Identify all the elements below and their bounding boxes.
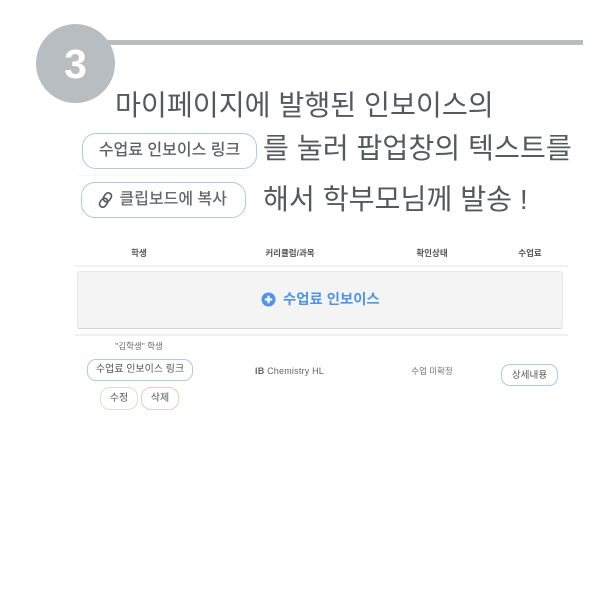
button: invoice link xyxy=(87,359,193,381)
instruction line 1: 마이페이지에 발행된 인보이스의 xyxy=(115,89,494,121)
button: details: 상세내용 xyxy=(512,370,547,381)
table header: curriculum: 커리큘럼/과목 xyxy=(265,248,315,258)
step number badge xyxy=(36,24,115,103)
step number badge: 3 xyxy=(64,41,87,87)
button: edit: 수정 xyxy=(110,393,128,404)
student name: "김학생" 학생 xyxy=(115,341,163,351)
button: edit xyxy=(100,387,138,410)
table header: fee: 수업료 xyxy=(518,248,542,258)
header rule xyxy=(105,40,583,45)
button: delete xyxy=(141,387,179,410)
button: details xyxy=(501,364,558,386)
header divider xyxy=(75,265,568,267)
course name: IB Chemistry HL xyxy=(255,366,324,376)
inline button: invoice link: 수업료 인보이스 링크 xyxy=(99,142,240,159)
inline button: invoice link xyxy=(82,133,257,169)
instruction line 3: 해서 학부모님께 발송 ! xyxy=(263,183,528,215)
button: delete: 삭제 xyxy=(151,393,169,404)
table header: student: 학생 xyxy=(131,248,147,258)
panel: add invoice xyxy=(77,271,563,329)
button: invoice link: 수업료 인보이스 링크 xyxy=(96,364,184,375)
button label: 클립보드에 복사 xyxy=(120,191,227,208)
confirmation status: 수업 미확정 xyxy=(411,366,453,376)
faint separator between buttons xyxy=(76,175,250,176)
table header: status: 확인상태 xyxy=(416,248,448,258)
button label: 수업료 인보이스 xyxy=(283,292,380,308)
icon: plus circle xyxy=(262,292,276,306)
icon: link xyxy=(98,192,112,208)
row divider xyxy=(75,334,568,336)
inline button: copy to clipboard xyxy=(81,182,246,218)
instruction line 2: 를 눌러 팝업창의 텍스트를 xyxy=(263,132,572,164)
